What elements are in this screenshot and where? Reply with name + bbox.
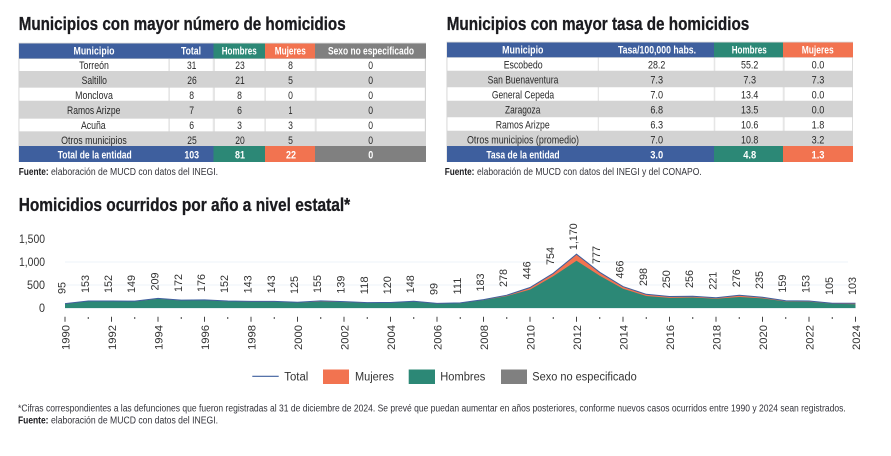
table: mayor número de homicidios: 25 (187, 135, 197, 147)
table: mayor número de homicidios: 3 (288, 120, 293, 132)
table: mayor número de homicidios: 6 (237, 105, 242, 117)
table: mayor número de homicidios: 8 (189, 90, 194, 102)
table: mayor número de homicidios: 0 (368, 90, 373, 102)
data labels (56, 223, 859, 295)
source note: tabla de número: Fuente: (19, 167, 49, 178)
data labels: 152 (103, 275, 115, 293)
data labels: 446 (522, 261, 534, 279)
table: mayor tasa de homicidios: 13.4 (741, 89, 758, 101)
table: mayor número de homicidios: 0 (368, 120, 373, 132)
footnote: elaboración de MUCD con datos del INEGI. (51, 416, 218, 427)
table: mayor tasa de homicidios: 7.0 (650, 89, 663, 101)
table: mayor número de homicidios: Acuña (81, 120, 106, 132)
table: mayor tasa de homicidios: San Buenaventura (488, 74, 559, 86)
x axis year labels: 1998 (246, 325, 258, 350)
data labels: 153 (80, 275, 92, 293)
table: mayor número de homicidios: Municipio (74, 46, 115, 58)
table: mayor tasa de homicidios: Hombres (732, 44, 767, 56)
table: mayor tasa de homicidios: 0.0 (812, 59, 824, 71)
table: mayor número de homicidios: 6 (189, 120, 194, 132)
table: mayor número de homicidios: 3 (237, 120, 242, 132)
source note: tabla de número: elaboración de MUCD con datos del INEGI. (51, 167, 218, 178)
x axis year labels: 1990 (60, 325, 72, 350)
table: mayor tasa de homicidios: 3.2 (812, 134, 824, 146)
table: mayor número de homicidios: 20 (235, 135, 245, 147)
heading: municipios con mayor número de homicidios: Municipios con mayor número de homicidios (19, 13, 346, 34)
data labels: 276 (731, 269, 743, 287)
source note: tabla de tasa: elaboración de MUCD con datos del INEGI y del CONAPO. (477, 167, 702, 178)
table: mayor tasa de homicidios: 28.2 (648, 59, 665, 71)
footnote (18, 404, 846, 427)
table: mayor número de homicidios: 103 (184, 150, 199, 162)
data labels: 176 (196, 274, 208, 292)
table: mayor tasa de homicidios: 4.8 (743, 150, 756, 162)
area chart: homicidios por año 1990-2024 (19, 223, 863, 350)
table: mayor número de homicidios: 1 (288, 105, 292, 117)
data labels: 95 (56, 282, 68, 294)
table: mayor tasa de homicidios (446, 42, 853, 162)
legend: Sexo no especificado (532, 372, 637, 384)
table: mayor tasa de homicidios: Tasa de la entidad (486, 150, 560, 162)
x axis year labels: 2014 (618, 325, 630, 350)
table: mayor número de homicidios: 0 (288, 90, 293, 102)
table: mayor tasa de homicidios: Municipio (502, 44, 544, 56)
y axis labels: 0 (39, 301, 45, 315)
y axis labels: 500 (27, 278, 45, 292)
x axis year labels: 2024 (851, 325, 863, 350)
x axis year labels: 2012 (572, 325, 584, 350)
data labels: 235 (754, 271, 766, 289)
table: mayor número de homicidios: Monclova (75, 90, 114, 102)
table: mayor número de homicidios: Total de la entidad (58, 150, 132, 162)
data labels: 120 (382, 276, 394, 294)
table: mayor tasa de homicidios: 6.3 (650, 119, 663, 131)
data labels: 466 (614, 260, 626, 278)
x axis year labels: 2018 (712, 325, 724, 350)
table: mayor número de homicidios: 0 (368, 60, 373, 72)
data labels: 105 (824, 277, 836, 295)
table: mayor tasa de homicidios: 6.8 (650, 104, 663, 116)
x axis year labels: 1992 (107, 325, 119, 350)
x axis year labels: 2016 (665, 325, 677, 350)
data labels: 278 (498, 269, 510, 287)
table: mayor número de homicidios: 8 (237, 90, 242, 102)
x axis year labels: 2002 (340, 325, 352, 350)
data labels: 172 (173, 274, 185, 292)
data labels: 183 (475, 274, 487, 292)
table: mayor número de homicidios: Mujeres (275, 46, 306, 58)
table: mayor tasa de homicidios: General Cepeda (492, 89, 555, 101)
table: mayor tasa de homicidios: 7.3 (743, 74, 756, 86)
data labels: 159 (777, 275, 789, 293)
data labels: 256 (684, 270, 696, 288)
footnote: Fuente: (18, 416, 48, 427)
table: mayor número de homicidios: 7 (189, 105, 194, 117)
table: mayor número de homicidios: 0 (368, 135, 373, 147)
table: mayor tasa de homicidios: 55.2 (741, 59, 758, 71)
x axis year labels: 2010 (526, 325, 538, 350)
data labels: 111 (452, 277, 464, 294)
heading: municipios con mayor tasa de homicidios: Municipios con mayor tasa de homicidios (447, 13, 749, 34)
table: mayor número de homicidios: 81 (235, 150, 245, 162)
table: mayor tasa de homicidios: Otros municipios (promedio) (467, 134, 579, 146)
data labels: 209 (150, 272, 162, 290)
table: mayor tasa de homicidios: 0.0 (812, 104, 824, 116)
y axis labels (19, 232, 45, 315)
area: mujeres (65, 254, 856, 308)
line: total (65, 254, 856, 304)
legend: Hombres (440, 372, 486, 384)
table: mayor tasa de homicidios: 10.6 (741, 119, 758, 131)
data labels: 143 (266, 275, 278, 293)
data labels: 148 (405, 275, 417, 293)
x axis year labels: 2000 (293, 325, 305, 350)
y axis labels: 1,000 (19, 255, 45, 269)
table: mayor tasa de homicidios: Ramos Arizpe (496, 119, 550, 131)
x axis year labels: 2004 (386, 325, 398, 350)
data labels: 103 (847, 277, 859, 295)
x axis year labels: 2022 (804, 325, 816, 350)
table: mayor tasa de homicidios: 1.3 (812, 150, 824, 162)
y axis labels: 1,500 (19, 232, 45, 246)
table: mayor tasa de homicidios: Zaragoza (505, 104, 541, 116)
data labels: 152 (219, 275, 231, 293)
table: mayor número de homicidios: Total (181, 46, 201, 58)
data labels: 221 (708, 272, 720, 290)
table: mayor tasa de homicidios: Escobedo (504, 59, 543, 71)
table: mayor número de homicidios: 26 (187, 75, 197, 87)
table: mayor número de homicidios: 23 (235, 60, 245, 72)
source note: tabla de tasa: Fuente: (445, 167, 474, 178)
table: mayor número de homicidios: 0 (368, 150, 373, 162)
data labels: 139 (336, 276, 348, 294)
x axis year labels: 2008 (479, 325, 491, 350)
table: mayor número de homicidios: Torreón (79, 60, 109, 72)
table: mayor tasa de homicidios: 7.0 (650, 134, 663, 146)
legend: Total (284, 372, 308, 384)
table: mayor número de homicidios: 0 (368, 75, 373, 87)
data labels: 143 (242, 275, 254, 293)
table: mayor tasa de homicidios: 3.0 (650, 150, 663, 162)
table: mayor número de homicidios: 5 (288, 75, 293, 87)
data labels: 149 (126, 275, 138, 293)
table: mayor número de homicidios: Ramos Arizpe (67, 105, 120, 117)
table: mayor número de homicidios: 8 (288, 60, 293, 72)
heading: homicidios por año: Homicidios ocurridos por año a nivel estatal* (19, 194, 351, 215)
table: mayor tasa de homicidios: 0.0 (812, 89, 824, 101)
table: mayor número de homicidios: 0 (368, 105, 373, 117)
table: mayor número de homicidios: 5 (288, 135, 293, 147)
table: mayor tasa de homicidios: 7.3 (650, 74, 663, 86)
table: mayor número de homicidios: 22 (286, 150, 296, 162)
table: mayor número de homicidios: Hombres (222, 46, 257, 58)
table: mayor número de homicidios (18, 43, 426, 162)
table: mayor tasa de homicidios: 7.3 (812, 74, 824, 86)
legend (252, 370, 637, 384)
x axis year labels: 2006 (432, 325, 444, 350)
x axis year labels: 1996 (200, 325, 212, 350)
data labels: 118 (359, 276, 371, 294)
x axis year labels: 1994 (154, 325, 166, 350)
data labels: 754 (545, 247, 557, 265)
table: mayor número de homicidios: Otros municipios (61, 135, 127, 147)
table: mayor tasa de homicidios: 13.5 (741, 104, 758, 116)
table: mayor número de homicidios: 21 (235, 75, 245, 87)
table: mayor tasa de homicidios: Tasa/100,000 habs. (618, 44, 696, 56)
table: mayor número de homicidios: Saltillo (82, 75, 107, 87)
data labels: 155 (312, 275, 324, 293)
x axis year labels (60, 325, 863, 350)
x axis ticks (65, 317, 856, 322)
data labels: 250 (661, 270, 673, 288)
table: mayor número de homicidios: 31 (187, 60, 196, 72)
table: mayor tasa de homicidios: 1.8 (812, 119, 824, 131)
data labels: 1,170 (568, 223, 580, 250)
data labels: 125 (289, 276, 301, 294)
area: hombres (65, 261, 856, 308)
data labels: 99 (428, 283, 440, 295)
data labels: 153 (800, 275, 812, 293)
legend: Mujeres (355, 372, 394, 384)
data labels: 777 (591, 246, 603, 264)
table: mayor tasa de homicidios: Mujeres (802, 44, 834, 56)
table: mayor tasa de homicidios: 10.8 (741, 134, 758, 146)
table: mayor número de homicidios: Sexo no especificado (328, 46, 414, 58)
x axis year labels: 2020 (758, 325, 770, 350)
data labels: 298 (638, 268, 650, 286)
